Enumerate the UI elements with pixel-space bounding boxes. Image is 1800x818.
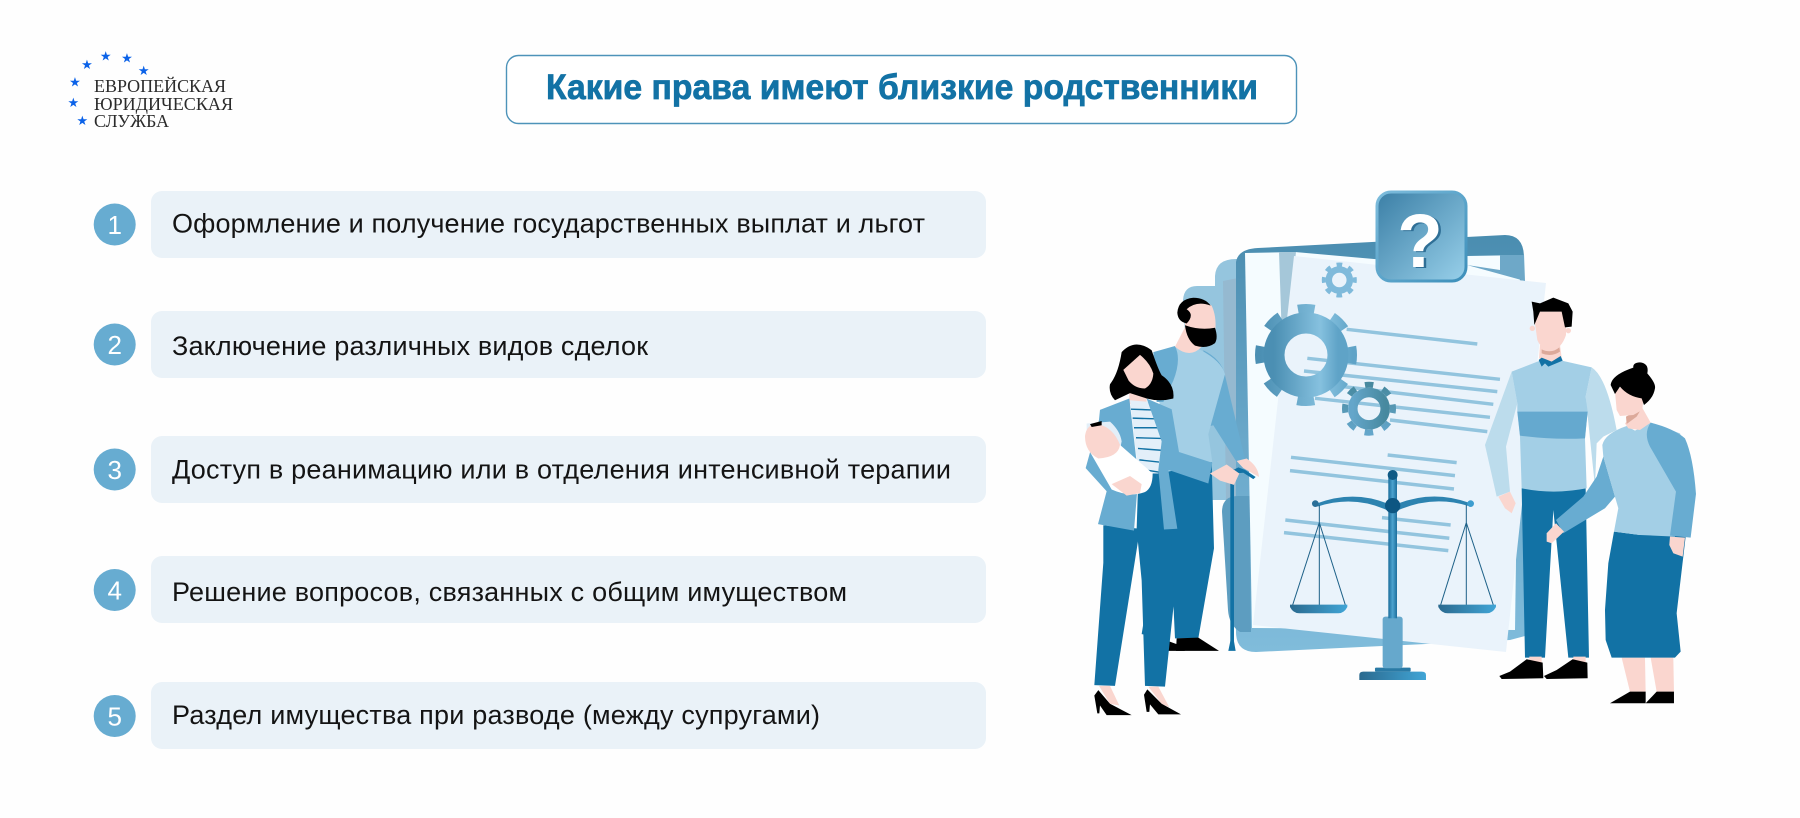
list item 5: 5	[107, 702, 122, 732]
list item 3: 3	[107, 455, 122, 485]
list item 2: 2	[107, 330, 122, 360]
icon: medium gear	[1345, 385, 1393, 433]
icon: small gear	[1324, 264, 1355, 296]
icon: logo stars: ★	[69, 76, 81, 90]
list item 1: Оформление и получение государственных выплат и льгот	[172, 208, 925, 238]
list item 5	[94, 682, 986, 749]
list item 1: 1	[107, 210, 122, 240]
person: woman holding a baby	[1085, 344, 1239, 715]
icon: logo stars: ★	[138, 64, 150, 79]
title: Какие права имеют близкие родственники	[546, 68, 1258, 107]
icon: logo stars: ★	[67, 96, 79, 111]
icon: question mark badge: ?	[1397, 198, 1443, 283]
icon: logo stars: ★	[100, 50, 112, 64]
list item 4: 4	[107, 576, 122, 606]
list item 3	[94, 436, 986, 503]
logo wordmark	[94, 76, 233, 131]
list of rights	[94, 191, 986, 749]
logo	[67, 50, 233, 131]
list item 4	[94, 556, 986, 623]
logo wordmark: ЮРИДИЧЕСКАЯ	[94, 94, 233, 114]
list item 2: Заключение различных видов сделок	[172, 331, 648, 361]
icon: question mark badge: ?	[1400, 199, 1445, 284]
icon: logo stars: ★	[76, 114, 88, 129]
title	[506, 56, 1296, 124]
person: woman with hair bun	[1547, 362, 1696, 703]
icon: logo stars: ★	[121, 52, 133, 66]
logo wordmark: СЛУЖБА	[94, 111, 169, 131]
icon: logo stars: ★	[81, 58, 93, 73]
person: man with beard and cane	[1142, 298, 1259, 651]
document text lines	[1284, 329, 1500, 551]
list item 3: Доступ в реанимацию или в отделения интенсивной терапии	[172, 454, 951, 484]
list item 2	[94, 311, 986, 378]
logo wordmark: ЕВРОПЕЙСКАЯ	[94, 76, 226, 96]
person: man in sweater	[1485, 298, 1617, 679]
illustration: family, document and scales	[1085, 192, 1696, 715]
list item 4: Решение вопросов, связанных с общим имуществом	[172, 577, 847, 607]
clipboard	[1183, 235, 1546, 652]
icon: logo stars	[67, 50, 150, 129]
icon: question mark badge	[1377, 192, 1466, 284]
list item 1	[94, 191, 986, 258]
list item 5: Раздел имущества при разводе (между супругами)	[172, 700, 820, 730]
icon: scales of justice	[1290, 470, 1496, 680]
icon: large gear	[1260, 309, 1352, 401]
